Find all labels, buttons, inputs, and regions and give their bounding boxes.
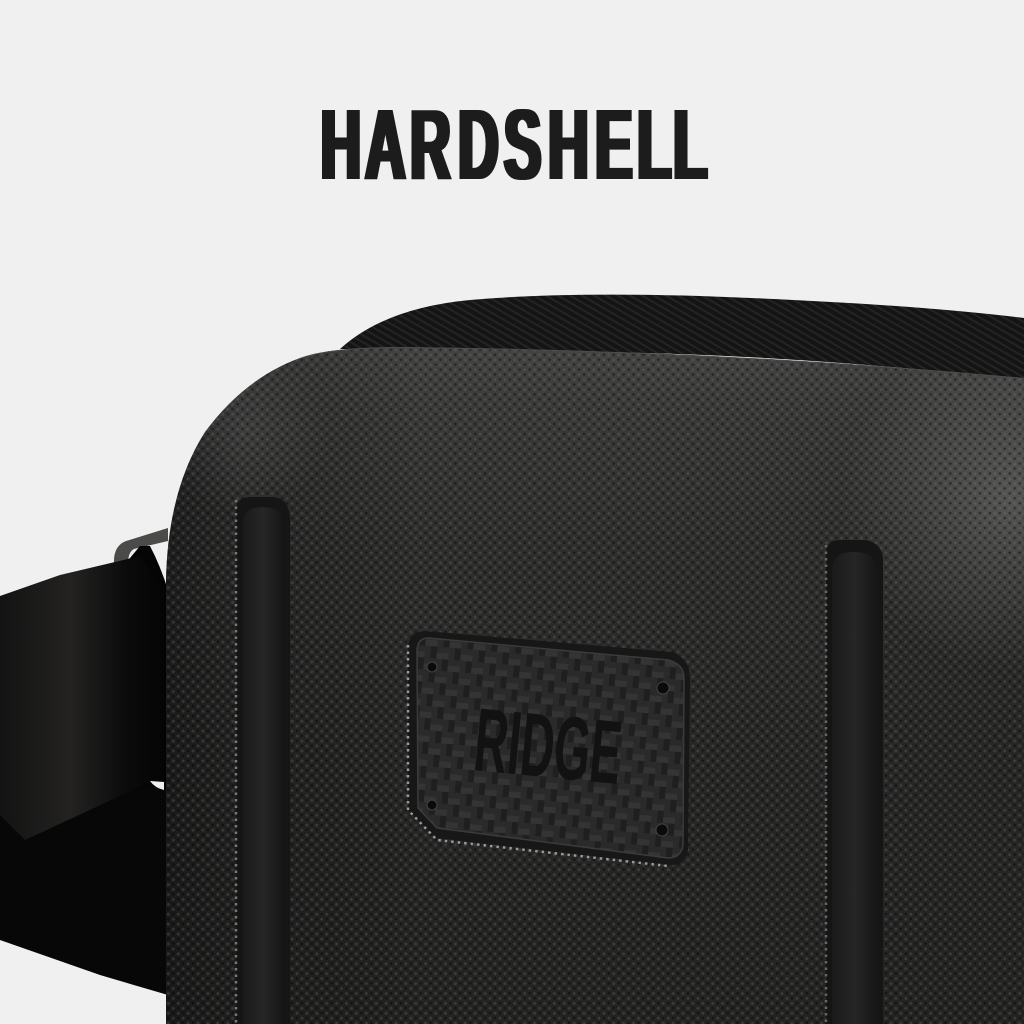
left vertical rib <box>236 497 290 1024</box>
top fabric panel <box>340 295 1024 380</box>
background gap <box>150 781 164 790</box>
strap rear loop <box>120 546 168 800</box>
badge screws <box>427 662 669 836</box>
badge logo text: RIDGE <box>470 690 626 804</box>
hard shell body <box>160 340 1024 1024</box>
strap lower band <box>0 785 168 995</box>
strap <box>0 528 168 995</box>
right vertical rib <box>826 540 883 1024</box>
carbon fibre logo badge <box>417 638 684 858</box>
badge recess <box>408 631 690 865</box>
buckle <box>114 528 168 564</box>
title: HARDSHELL <box>321 90 707 201</box>
strap upper band <box>0 556 168 840</box>
